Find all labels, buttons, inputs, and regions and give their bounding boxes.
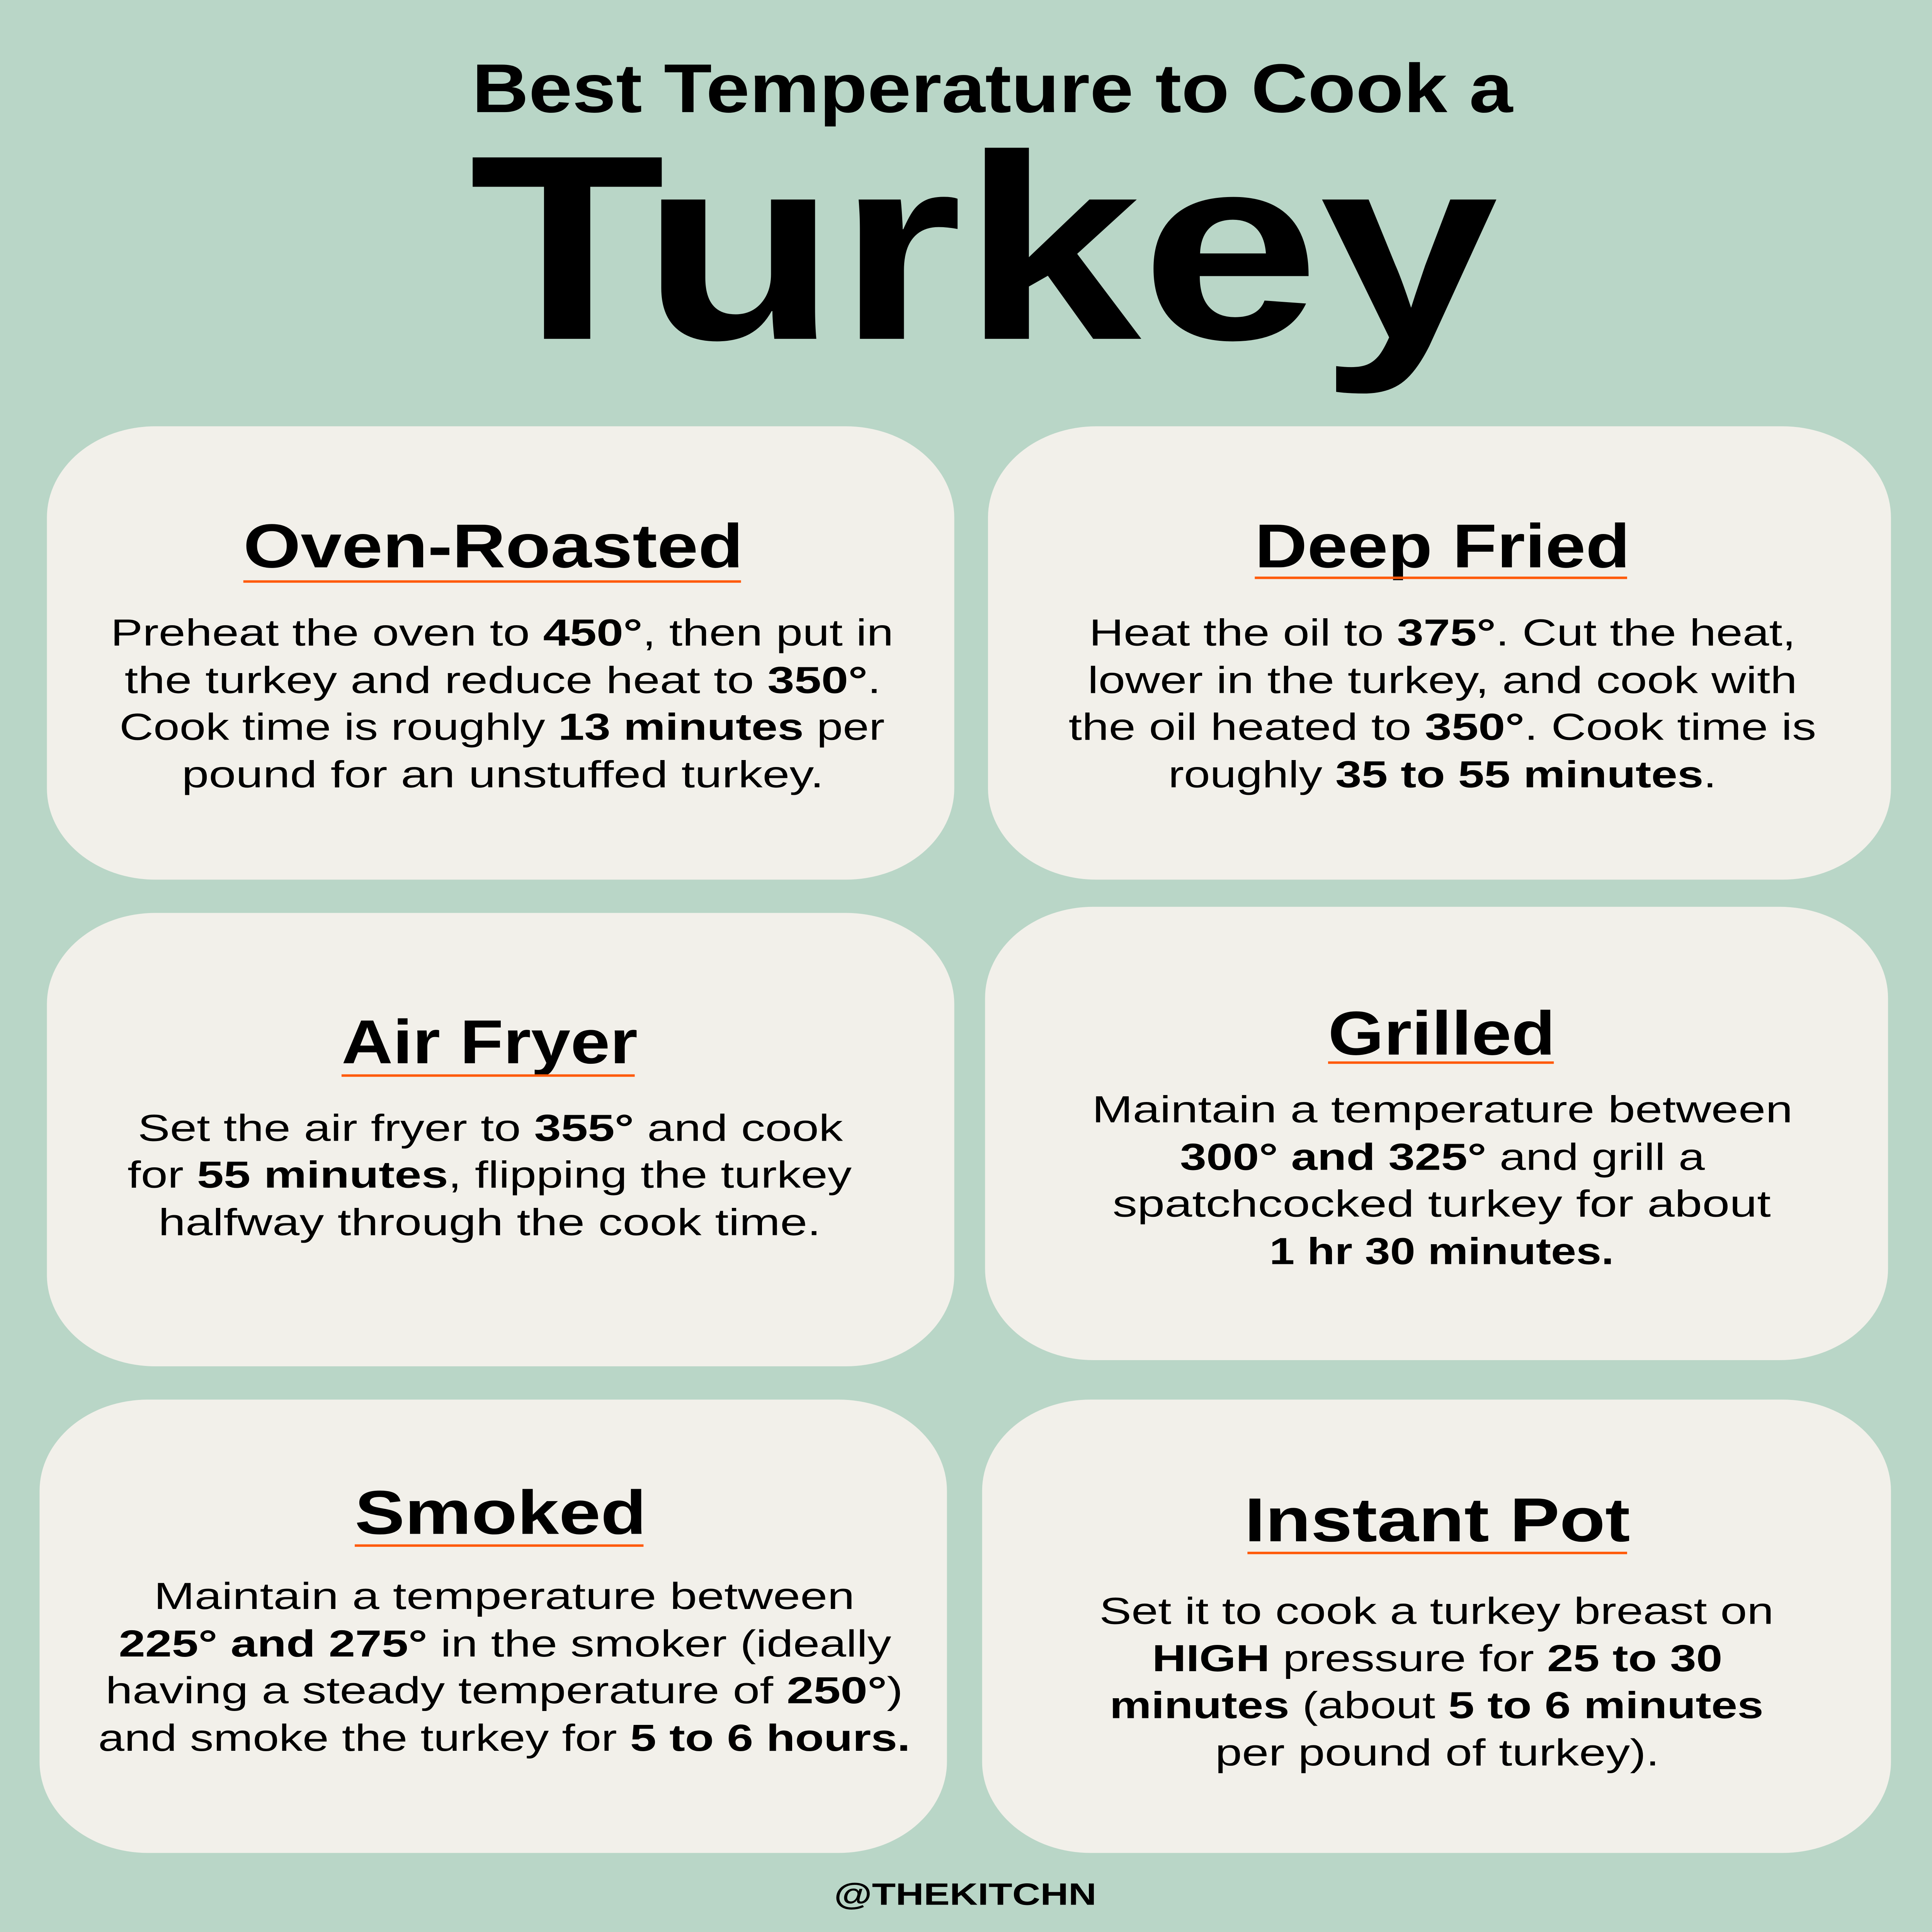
body text: grilled: 1 hr 30 minutes. [1269, 1230, 1614, 1272]
title [469, 49, 1514, 396]
panel: instant pot [982, 1400, 1891, 1853]
body text: oven-roasted: Cook time is roughly 13 minutes per [119, 706, 884, 748]
heading: air fryer: Air Fryer [342, 1007, 638, 1077]
body text: deep fried: lower in the turkey, and cook with [1088, 659, 1797, 701]
underline: smoked [355, 1544, 643, 1547]
body text: air fryer: Set the air fryer to 355° and cook [138, 1107, 843, 1149]
heading: grilled: Grilled [1328, 999, 1555, 1068]
heading: deep fried: Deep Fried [1255, 512, 1630, 581]
body text: smoked: having a steady temperature of 250° ) [105, 1669, 903, 1711]
panel: smoked [39, 1400, 947, 1853]
panel: air fryer [47, 913, 954, 1366]
body text: instant pot [1099, 1590, 1774, 1774]
heading: smoked: Smoked [355, 1478, 646, 1547]
body text: instant pot: HIGH pressure for 25 to 30 [1152, 1637, 1723, 1679]
underline: deep fried [1255, 577, 1627, 579]
underline: oven-roasted [243, 580, 741, 583]
body text: deep fried: the oil heated to 350° . Cook time is [1069, 706, 1816, 748]
panel: deep fried [988, 426, 1891, 880]
body text: instant pot: per pound of turkey). [1215, 1731, 1659, 1774]
panel: oven-roasted [47, 426, 954, 880]
body text: instant pot: Set it to cook a turkey breast on [1099, 1590, 1774, 1632]
body text: oven-roasted: pound for an unstuffed turkey. [182, 753, 824, 795]
heading: oven-roasted: Oven-Roasted [243, 512, 743, 581]
heading: instant pot: Instant Pot [1245, 1485, 1630, 1554]
panel: grilled [985, 907, 1888, 1360]
body text: grilled: 300° and 325° and grill a [1180, 1136, 1705, 1178]
title line: best temperature: Best Temperature to Cook a [472, 49, 1514, 127]
body text: air fryer [128, 1107, 852, 1243]
body text: grilled: spatchcocked turkey for about [1112, 1182, 1771, 1225]
underline: grilled [1328, 1061, 1554, 1064]
footer handle: @THEKITCHN [834, 1877, 1097, 1912]
body text: air fryer: for 55 minutes , flipping the turkey [128, 1153, 852, 1196]
underline: air fryer [342, 1074, 635, 1077]
body text: deep fried: roughly 35 to 55 minutes . [1168, 753, 1716, 795]
body text: air fryer: halfway through the cook time. [158, 1201, 821, 1243]
underline: instant pot [1247, 1552, 1627, 1554]
body text: smoked: and smoke the turkey for 5 to 6 hours. [98, 1717, 910, 1759]
body text: deep fried: Heat the oil to 375° . Cut the heat, [1089, 611, 1796, 654]
body text: instant pot: minutes (about 5 to 6 minutes [1110, 1684, 1764, 1726]
body text: deep fried [1069, 611, 1816, 795]
body text: smoked [98, 1575, 910, 1759]
body text: smoked: Maintain a temperature between [154, 1575, 855, 1617]
body text: oven-roasted: Preheat the oven to 450° , then put in [111, 611, 893, 654]
title word: turkey: Turkey [469, 100, 1500, 396]
body text: smoked: 225° and 275° in the smoker (ideally [119, 1622, 891, 1665]
body text: grilled: Maintain a temperature between [1092, 1088, 1793, 1131]
body text: oven-roasted [111, 611, 893, 795]
body text: grilled [1092, 1088, 1793, 1272]
body text: oven-roasted: the turkey and reduce heat to 350° . [124, 659, 881, 701]
